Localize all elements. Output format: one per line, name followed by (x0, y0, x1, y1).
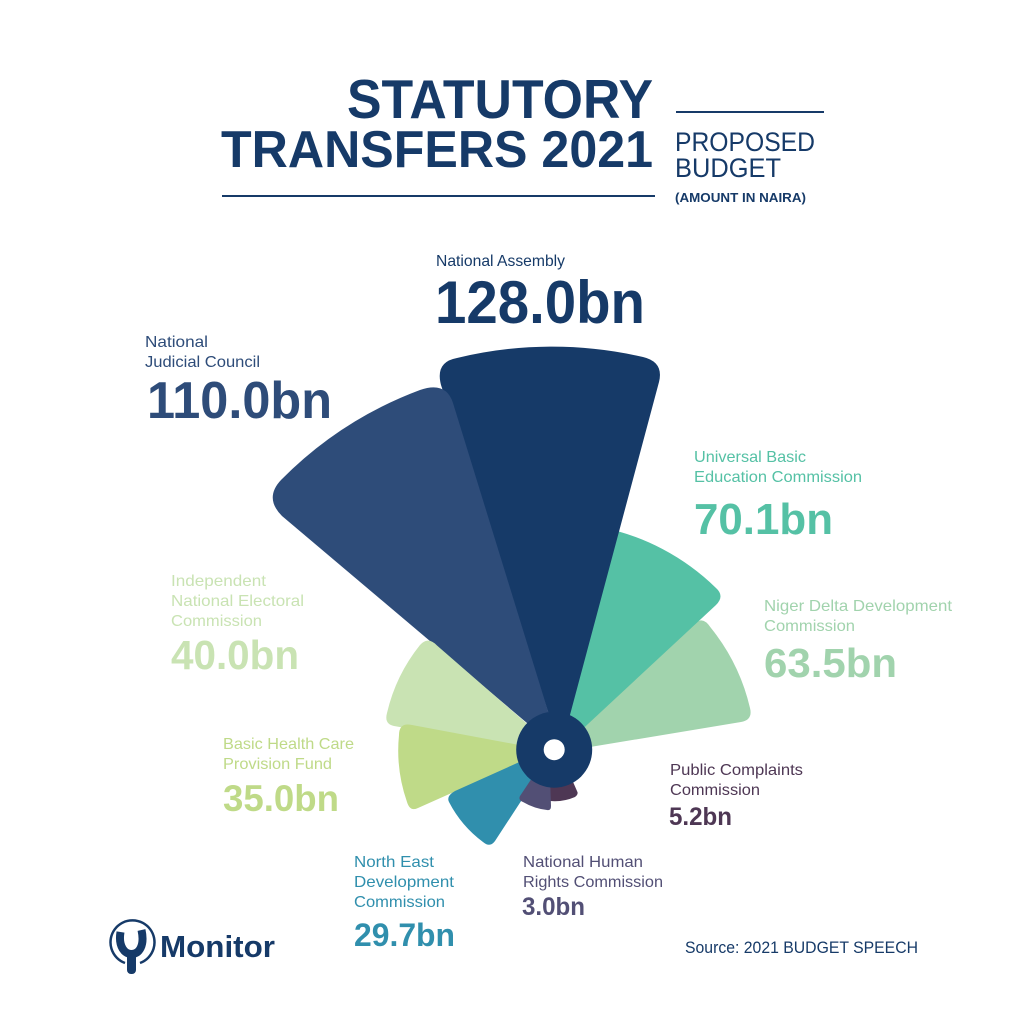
sector: North East Development Commission (448, 755, 540, 845)
label: National Human Rights Commission: Rights Commission (523, 874, 663, 891)
label: Public Complaints Commission: 5.2bn (669, 803, 732, 831)
label: Universal Basic Education Commission: Education Commission (694, 469, 862, 486)
label: National Assembly: National Assembly (436, 253, 565, 270)
label: North East Development Commission (354, 854, 455, 953)
label: Universal Basic Education Commission: Universal Basic (694, 449, 806, 466)
subtitle: proposed budget (675, 111, 824, 205)
title (221, 68, 653, 179)
label: Public Complaints Commission: Public Complaints (670, 762, 803, 779)
subtitle: proposed budget: PROPOSED (675, 127, 815, 157)
label: Public Complaints Commission (669, 762, 803, 831)
sector: Universal Basic Education Commission (560, 527, 720, 750)
label: Niger Delta Development Commission: Commission (764, 618, 855, 635)
label: Independent National Electoral Commission: 40.0bn (171, 632, 299, 678)
sector: Basic Health Care Provision Fund (398, 724, 530, 809)
chart hub (516, 712, 592, 788)
label: National Judicial Council: Judicial Council (145, 354, 260, 371)
label: North East Development Commission: Development (354, 874, 455, 891)
label: North East Development Commission: Commission (354, 894, 445, 911)
sector: National Human Rights Commission (519, 772, 551, 810)
label: National Judicial Council (145, 334, 332, 430)
title: STATUTORY (347, 68, 653, 130)
icon: ring and wrench (111, 920, 155, 974)
subtitle: proposed budget: (AMOUNT IN NAIRA) (675, 191, 806, 205)
sector: National Judicial Council (273, 387, 560, 750)
logo: Monitor (111, 920, 275, 974)
label: Independent National Electoral Commission (171, 573, 304, 678)
radial bar chart (273, 347, 751, 845)
label: Public Complaints Commission: Commission (670, 782, 760, 799)
label: National Human Rights Commission (522, 854, 663, 921)
label: Basic Health Care Provision Fund (223, 736, 354, 819)
label: Independent National Electoral Commission: Independent (171, 573, 267, 590)
subtitle: proposed budget: BUDGET (675, 153, 781, 183)
title: TRANSFERS 2021 (221, 121, 653, 179)
sector: Public Complaints Commission (550, 775, 578, 801)
label: National Human Rights Commission: 3.0bn (522, 893, 585, 921)
label: Basic Health Care Provision Fund: Basic Health Care (223, 736, 354, 753)
label: National Assembly: 128.0bn (435, 269, 645, 336)
label: Basic Health Care Provision Fund: Provision Fund (223, 756, 332, 773)
label: North East Development Commission: 29.7bn (354, 917, 455, 953)
label: Niger Delta Development Commission: 63.5bn (764, 640, 897, 686)
sector: Niger Delta Development Commission (560, 620, 751, 752)
label: National Human Rights Commission: National Human (523, 854, 643, 871)
label: Independent National Electoral Commission: National Electoral (171, 593, 304, 610)
label: Niger Delta Development Commission (764, 598, 953, 686)
label: Universal Basic Education Commission: 70.1bn (694, 495, 833, 544)
label: North East Development Commission: North East (354, 854, 435, 871)
source note: Source: 2021 BUDGET SPEECH (685, 939, 918, 957)
label: Niger Delta Development Commission: Niger Delta Development (764, 598, 953, 615)
sector: National Assembly (440, 347, 660, 750)
label: National Judicial Council: 110.0bn (147, 372, 332, 430)
label: Independent National Electoral Commission: Commission (171, 613, 262, 630)
label: Basic Health Care Provision Fund: 35.0bn (223, 778, 339, 819)
logo: Monitor: Monitor (160, 929, 275, 964)
sector: Independent National Electoral Commission (386, 641, 540, 750)
label: National Judicial Council: National (145, 334, 208, 351)
label: Universal Basic Education Commission (694, 449, 862, 544)
